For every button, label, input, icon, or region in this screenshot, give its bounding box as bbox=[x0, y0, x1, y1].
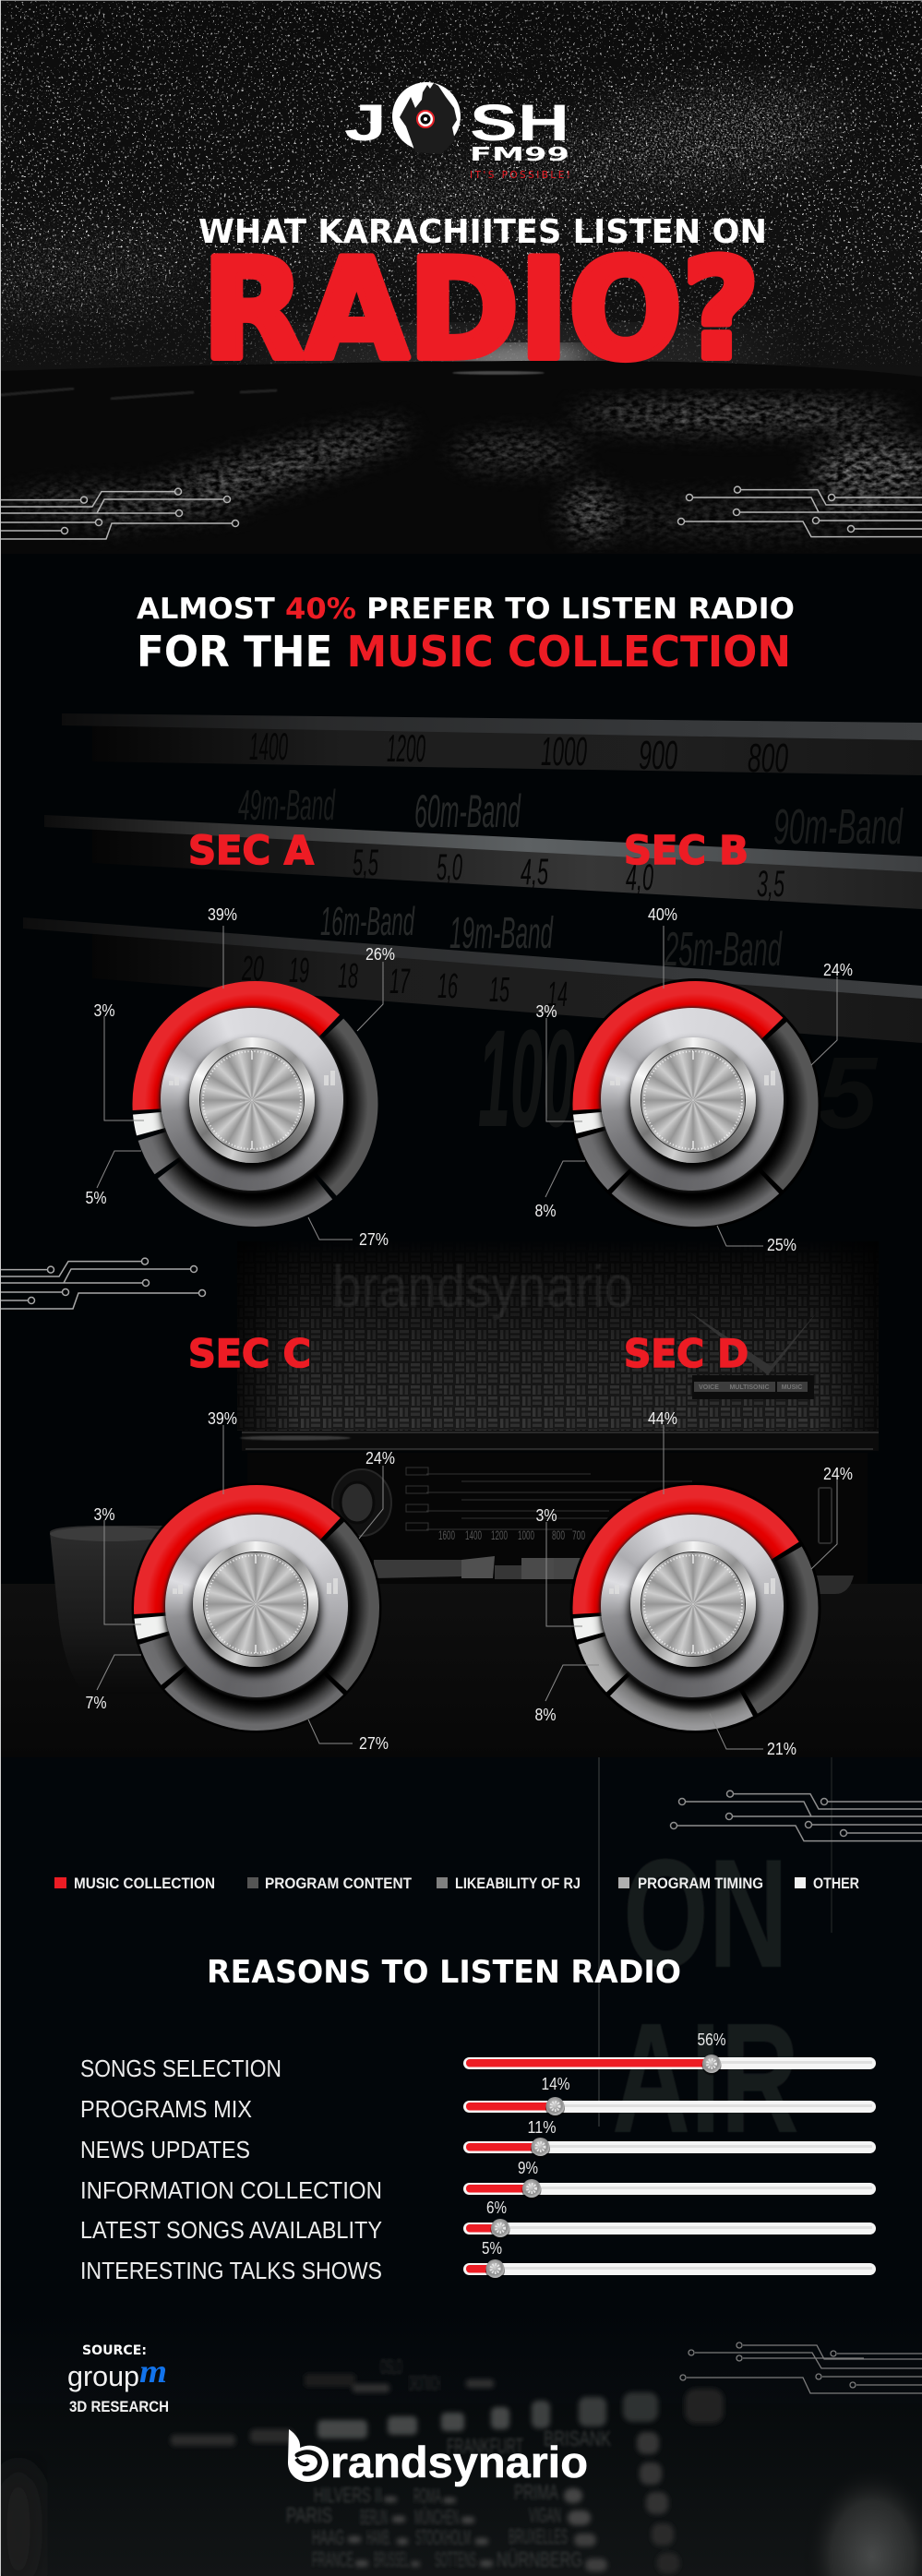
legend: PROGRAM CONTENT bbox=[265, 1875, 413, 1892]
legend: LIKEABILITY OF RJ bbox=[455, 1875, 581, 1892]
panel: blurred footer dial: HAAG bbox=[312, 2525, 344, 2549]
value labels: sec a: 3% bbox=[94, 1001, 114, 1020]
knob dial: sec b bbox=[629, 1037, 755, 1163]
panel: radio dial background: 19 bbox=[289, 952, 309, 990]
slider row: news updates: 11% bbox=[528, 2118, 556, 2137]
panel: blurred footer dial: SOTTENS bbox=[435, 2547, 476, 2571]
knob dial: sec a bbox=[189, 1037, 315, 1163]
source block: 3D RESEARCH bbox=[69, 2398, 169, 2415]
panel: radio dial background: 20 bbox=[241, 950, 264, 988]
panel: radio grille and dial background: 1000 bbox=[518, 1528, 534, 1542]
panel: radio dial background: 5 bbox=[818, 1036, 879, 1150]
panel: blurred footer dial: BRUSSEL bbox=[374, 2547, 409, 2571]
value labels: sec a: 27% bbox=[359, 1230, 389, 1249]
value labels: sec d: 21% bbox=[767, 1740, 796, 1758]
panel: blurred footer dial: PRIMA bbox=[514, 2480, 558, 2504]
panel: blurred footer dial: ROMA bbox=[413, 2484, 441, 2508]
panel: blurred footer dial: BRUXELLES bbox=[509, 2524, 568, 2548]
panel: blurred footer dial: BRISANK bbox=[544, 2426, 611, 2450]
panel: radio dial background: 19m-Band bbox=[449, 909, 554, 958]
text: on air sign bbox=[612, 1827, 799, 2166]
leader lines: sec d bbox=[545, 1425, 837, 1749]
panel: blurred footer dial: OSLO bbox=[380, 2354, 402, 2378]
panel: radio dial background: 17 bbox=[389, 963, 411, 1001]
panel: starry sky header bbox=[0, 0, 922, 554]
panel: radio dial background: 5,0 bbox=[437, 847, 462, 888]
donut ring: sec d bbox=[549, 1462, 842, 1754]
panel: blurred footer dial: STOCKHOLM bbox=[415, 2525, 471, 2549]
panel: radio grille and dial background: 1400 bbox=[465, 1528, 482, 1542]
value labels: sec c: 24% bbox=[365, 1449, 395, 1468]
chart: sec d dial bbox=[535, 1409, 853, 1758]
knob plate: sec d bbox=[601, 1515, 784, 1697]
knob plate: sec b bbox=[601, 1008, 784, 1191]
panel: radio dial background: 5,5 bbox=[353, 843, 378, 883]
chart: sec b dial bbox=[535, 905, 853, 1254]
source block: group bbox=[67, 2360, 139, 2392]
value labels: sec a: 26% bbox=[365, 945, 395, 964]
panel: radio dial background: 1000 bbox=[541, 729, 587, 774]
knob plate: sec a bbox=[161, 1008, 343, 1191]
knob dial: sec d bbox=[629, 1541, 755, 1667]
value labels: sec a: 5% bbox=[85, 1189, 107, 1207]
panel: radio dial background: 16m-Band bbox=[320, 899, 415, 944]
slider row: news updates bbox=[80, 2118, 876, 2163]
panel: radio grille and dial background: VOICE bbox=[699, 1384, 719, 1391]
knob dial: sec c bbox=[193, 1541, 318, 1667]
logo: Josh FM99: IT'S POSSIBLE! bbox=[470, 170, 570, 181]
source block: m bbox=[139, 2353, 167, 2390]
panel: radio dial background: 900 bbox=[639, 733, 677, 778]
logo: Josh FM99: SH bbox=[470, 93, 569, 151]
slider row: information collection: INFORMATION COLLECTION bbox=[80, 2176, 382, 2204]
chart: sec a dial bbox=[85, 905, 395, 1249]
legend: OTHER bbox=[813, 1875, 859, 1892]
decoration: circuit middle left bbox=[0, 1258, 205, 1309]
chart: reasons sliders bbox=[80, 2031, 876, 2284]
panel: radio dial background: 4,5 bbox=[521, 852, 548, 893]
value labels: sec c: 27% bbox=[359, 1734, 389, 1753]
leader lines: sec b bbox=[545, 926, 837, 1246]
text: on air sign: AIR bbox=[612, 1991, 799, 2166]
decoration: circuit top right bbox=[677, 486, 922, 537]
panel: radio grille and dial background: 800 bbox=[552, 1528, 565, 1542]
value labels: sec d: 24% bbox=[823, 1465, 853, 1483]
panel: blurred footer dial: DROITWICH bbox=[409, 2371, 440, 2395]
value labels: sec d: 44% bbox=[648, 1409, 677, 1428]
heading: sec b: SEC B bbox=[624, 828, 748, 874]
heading: almost 40 percent: ALMOST 40% PREFER TO LISTEN RADIO bbox=[137, 593, 795, 626]
panel: radio grille and dial background: 1600 bbox=[438, 1528, 455, 1542]
text: on air sign: ON bbox=[623, 1827, 788, 2000]
slider row: programs mix: 14% bbox=[541, 2075, 570, 2093]
donut ring: sec c bbox=[111, 1462, 402, 1754]
source block: SOURCE: bbox=[82, 2343, 147, 2358]
panel: radio dial background: 4,0 bbox=[626, 857, 653, 898]
legend bbox=[54, 1875, 859, 1892]
icon: coffee mug bbox=[50, 1526, 175, 1694]
value labels: sec c bbox=[85, 1409, 395, 1753]
panel: radio dial background: 16 bbox=[437, 967, 458, 1006]
slider row: interesting talks shows: INTERESTING TALKS SHOWS bbox=[80, 2257, 382, 2284]
panel: radio dial background: 49m-Band bbox=[238, 781, 336, 829]
title: what karachiites listen on: WHAT KARACHIITES LISTEN ON bbox=[198, 213, 767, 251]
slider row: songs selection bbox=[80, 2031, 876, 2082]
value labels: sec d bbox=[535, 1409, 853, 1758]
value labels: sec d: 3% bbox=[535, 1506, 557, 1525]
logo: Josh FM99 bbox=[344, 82, 570, 181]
panel: radio grille and dial background: 700 bbox=[572, 1528, 585, 1542]
logo: Josh FM99: FM99 bbox=[470, 143, 569, 165]
panel: radio dial background: 60m-Band bbox=[414, 785, 521, 837]
chart: sec c dial bbox=[85, 1409, 395, 1753]
title: radio: RADIO? bbox=[202, 231, 760, 390]
legend: MUSIC COLLECTION bbox=[74, 1875, 215, 1892]
value labels: sec b bbox=[535, 905, 853, 1254]
logo: brandsynario: randsynario bbox=[330, 2438, 588, 2486]
value labels: sec a: 39% bbox=[208, 905, 237, 924]
panel: radio dial background: 1200 bbox=[387, 726, 425, 770]
panel: radio dial background: 14 bbox=[547, 976, 568, 1014]
value labels: sec c: 3% bbox=[94, 1505, 114, 1524]
panel: radio dial background: 100 bbox=[478, 1000, 575, 1156]
heading: sec c: SEC C bbox=[188, 1331, 311, 1376]
panel: radio grille and dial background: MUSIC bbox=[782, 1384, 802, 1391]
leader lines: sec a bbox=[97, 926, 383, 1240]
slider row: interesting talks shows: 5% bbox=[482, 2239, 502, 2258]
panel: radio dial background: 15 bbox=[489, 971, 509, 1010]
heading: sec a: SEC A bbox=[188, 828, 315, 874]
decoration: circuit middle right bbox=[670, 1791, 922, 1841]
panel: blurred footer dial bbox=[0, 2307, 922, 2576]
decoration: circuit bottom right bbox=[680, 2342, 922, 2393]
slider row: songs selection: SONGS SELECTION bbox=[80, 2055, 281, 2082]
panel: blurred footer dial: MÜNCHEN bbox=[414, 2505, 459, 2529]
slider row: songs selection: 56% bbox=[698, 2031, 725, 2049]
panel: blurred footer dial: HILVERS II bbox=[314, 2483, 382, 2507]
value labels: sec c: 39% bbox=[208, 1409, 237, 1428]
panel: radio dial background: 1400 bbox=[249, 725, 288, 768]
slider row: information collection: 9% bbox=[518, 2159, 538, 2177]
slider row: latest songs availablity: LATEST SONGS AVAILABLITY bbox=[80, 2216, 382, 2244]
panel: blurred footer dial: FRANKFURT bbox=[447, 2434, 523, 2458]
panel: radio dial background: 25m-Band bbox=[664, 923, 783, 976]
slider row: programs mix: PROGRAMS MIX bbox=[80, 2095, 252, 2123]
panel: blurred footer dial: FRANCE bbox=[312, 2547, 353, 2571]
panel: radio dial background: 3,5 bbox=[757, 864, 784, 905]
decoration: circuit top left bbox=[0, 488, 238, 539]
slider row: programs mix bbox=[80, 2075, 876, 2123]
panel: radio grille and dial background: brandsynario bbox=[332, 1253, 633, 1320]
leader lines: sec c bbox=[97, 1425, 383, 1743]
heading: for the music collection: FOR THE MUSIC COLLECTION bbox=[137, 627, 791, 677]
panel: radio grille and dial background bbox=[0, 1241, 922, 2403]
value labels: sec c: 7% bbox=[85, 1694, 107, 1712]
panel: radio grille and dial background: 1200 bbox=[491, 1528, 508, 1542]
knob plate: sec c bbox=[165, 1515, 348, 1697]
value labels: sec b: 25% bbox=[767, 1236, 796, 1254]
donut ring: sec a bbox=[109, 958, 401, 1250]
slider row: interesting talks shows bbox=[80, 2239, 876, 2284]
panel: blurred footer dial: BERLIN bbox=[360, 2505, 388, 2529]
value labels: sec d: 8% bbox=[535, 1706, 556, 1724]
value labels: sec b: 40% bbox=[648, 905, 677, 924]
heading: reasons to listen radio: REASONS TO LISTEN RADIO bbox=[207, 1954, 681, 1991]
source block bbox=[67, 2343, 169, 2415]
slider row: latest songs availablity: 6% bbox=[486, 2199, 507, 2217]
logo: Josh FM99: J bbox=[344, 93, 387, 151]
panel: radio dial background: 800 bbox=[748, 736, 788, 781]
slider row: latest songs availablity bbox=[80, 2199, 876, 2244]
panel: radio dial background: 18 bbox=[338, 957, 358, 996]
panel: blurred footer dial: PARIS bbox=[286, 2503, 332, 2527]
donut ring: sec b bbox=[549, 958, 842, 1250]
value labels: sec b: 8% bbox=[535, 1202, 556, 1220]
value labels: sec b: 3% bbox=[535, 1002, 557, 1021]
panel: blurred footer dial: VIGAN bbox=[529, 2503, 561, 2527]
value labels: sec a bbox=[85, 905, 395, 1249]
panel: blurred footer dial: NÜRNBERG bbox=[497, 2547, 582, 2571]
panel: radio grille and dial background: MULTISONIC bbox=[729, 1384, 770, 1391]
panel: blurred footer dial: HAMB. bbox=[366, 2525, 391, 2549]
heading: sec d: SEC D bbox=[624, 1331, 748, 1376]
panel: radio dial background bbox=[0, 554, 922, 1763]
value labels: sec b: 24% bbox=[823, 961, 853, 979]
slider row: information collection bbox=[80, 2159, 876, 2204]
slider row: news updates: NEWS UPDATES bbox=[80, 2136, 250, 2163]
legend: PROGRAM TIMING bbox=[638, 1875, 763, 1892]
